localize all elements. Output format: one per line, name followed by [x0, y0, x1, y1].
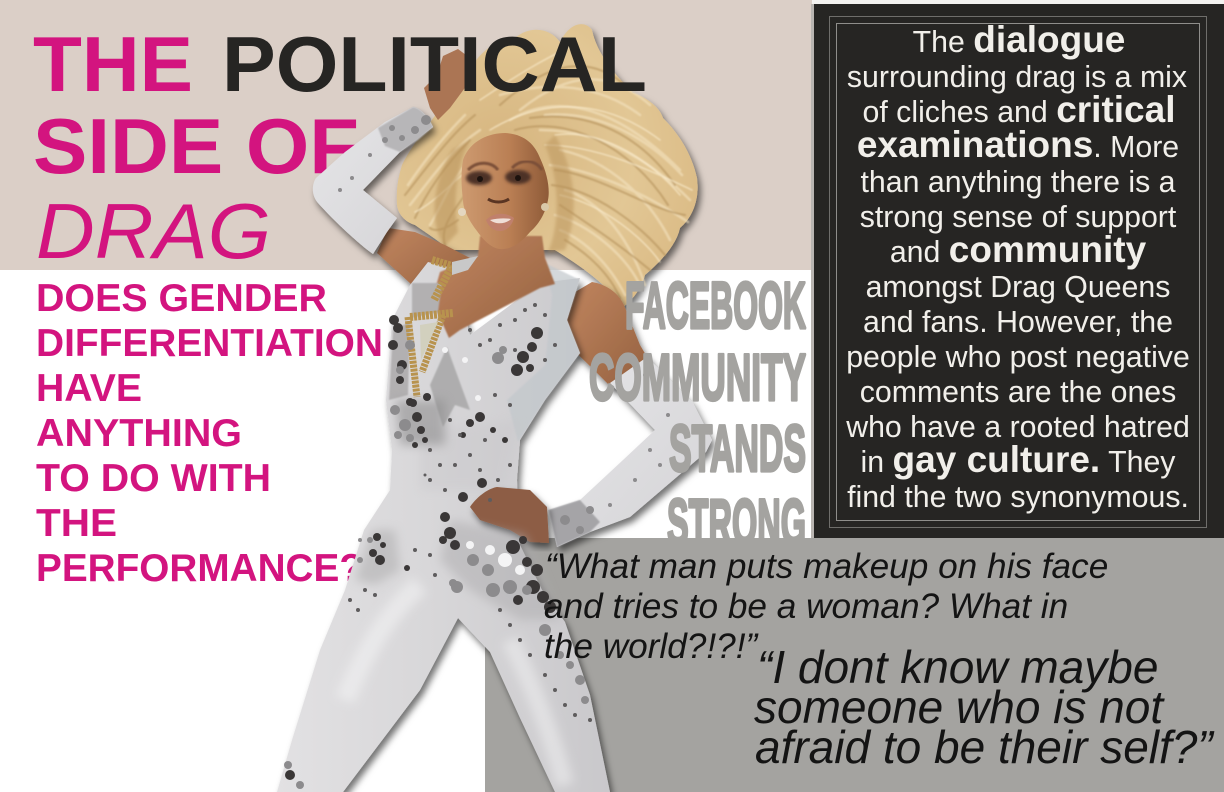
subheading question: DOES GENDER: [36, 277, 327, 320]
stacked slogan: Facebook community stands strong: COMMUNITY: [589, 340, 806, 414]
quote: supportive reply: [754, 641, 1215, 773]
hand on hip: [470, 487, 549, 543]
subheading question: DIFFERENTIATION: [36, 322, 383, 365]
panel: dark commentary box: [811, 0, 1224, 538]
quote: supportive reply: “I dont know maybe: [757, 641, 1158, 693]
commentary text: and fans. However, the: [863, 306, 1173, 339]
panel: beige header background: [0, 0, 812, 270]
face: [458, 133, 549, 249]
figure: drag queen in silver sequinned bodysuit: [277, 24, 712, 792]
commentary text: of cliches and critical: [863, 89, 1175, 130]
commentary text: The dialogue: [913, 19, 1125, 60]
title line: the political: [33, 20, 647, 108]
quote: negative comment: “What man puts makeup on his face: [545, 547, 1108, 586]
text: FACEBOOK: [625, 268, 806, 342]
gold brooch: [389, 256, 478, 427]
commentary text: and community: [890, 229, 1147, 270]
title line: side of: SIDE OF: [33, 102, 359, 190]
commentary text: surrounding drag is a mix: [847, 61, 1187, 94]
quote: negative comment: the world?!?!”: [544, 627, 759, 666]
commentary text: people who post negative: [846, 341, 1190, 374]
commentary text: than anything there is a: [861, 166, 1176, 199]
hair: [397, 24, 698, 308]
neck and chest: [432, 236, 555, 338]
commentary text: examinations. More: [857, 124, 1179, 165]
quote: supportive reply: afraid to be their self?”: [755, 721, 1215, 773]
title line: the political: THE: [33, 20, 193, 108]
commentary text: who have a rooted hatred: [845, 411, 1190, 444]
quote: supportive reply: someone who is not: [754, 681, 1165, 733]
stacked slogan: Facebook community stands strong: [589, 268, 806, 559]
subheading question: PERFORMANCE?: [36, 547, 363, 590]
raised arm and hand: [313, 49, 470, 300]
title line: the political: POLITICAL: [222, 20, 647, 108]
commentary text: amongst Drag Queens: [866, 271, 1170, 304]
gray panel top edge over slogan: [610, 538, 1224, 550]
commentary text: [845, 19, 1190, 514]
subheading question: [36, 277, 383, 590]
subheading question: HAVE: [36, 367, 142, 410]
commentary text: find the two synonymous.: [847, 481, 1189, 514]
right arm and glove: [548, 282, 712, 547]
stacked slogan: Facebook community stands strong: STANDS: [669, 411, 806, 485]
quote: negative comment: and tries to be a woman? What in: [544, 587, 1068, 626]
subheading question: ANYTHING: [36, 412, 242, 455]
subheading question: THE: [36, 502, 117, 545]
text: STRONG: [667, 485, 806, 559]
sequins: [284, 115, 670, 789]
commentary text: comments are the ones: [860, 376, 1176, 409]
bodysuit: [277, 262, 610, 792]
commentary text: strong sense of support: [860, 201, 1177, 234]
commentary text: in gay culture. They: [861, 439, 1176, 480]
title line: drag: DRAG: [36, 187, 271, 275]
subheading question: TO DO WITH: [36, 457, 271, 500]
panel: gray quote background: [485, 538, 1224, 792]
quote: negative comment: [544, 547, 1108, 666]
